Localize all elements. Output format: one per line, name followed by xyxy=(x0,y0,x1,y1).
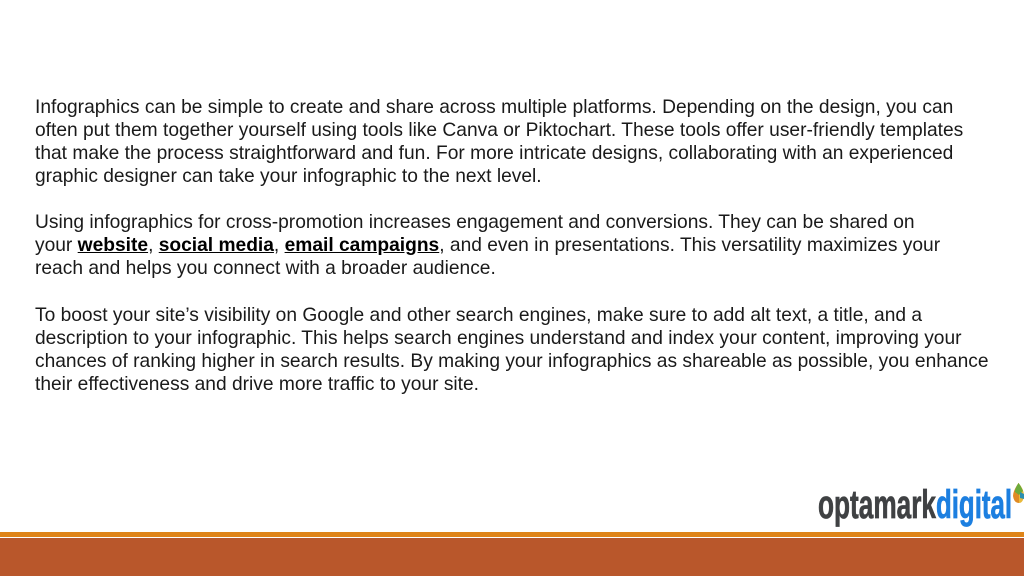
icon: colored drop xyxy=(1013,483,1024,503)
paragraph: search visibility: description to your infographic. This helps search engines understand and index your content, improving your xyxy=(35,328,962,349)
footer: orange stripe xyxy=(0,532,1024,537)
paragraph: creating infographics: often put them together yourself using tools like Canva or Piktochart. These tools offer user-friendly templates xyxy=(35,120,963,141)
paragraph: cross-promotion: your website, social media, email campaigns, and even in presentations. This versatility maximizes your xyxy=(35,235,940,256)
paragraph: search visibility: chances of ranking higher in search results. By making your infographics as shareable as possible, you enhance xyxy=(35,351,989,372)
paragraph: search visibility: To boost your site’s visibility on Google and other search engines, make sure to add alt text, a title, and a xyxy=(35,305,922,326)
logo: optamarkdigital xyxy=(818,483,1024,527)
paragraph: creating infographics: graphic designer can take your infographic to the next level. xyxy=(35,166,542,187)
footer: brown band xyxy=(0,538,1024,576)
paragraph: creating infographics: that make the process straightforward and fun. For more intricate designs, collaborating with an experienced xyxy=(35,143,953,164)
paragraph: creating infographics: Infographics can be simple to create and share across multiple platforms. Depending on the design, you can xyxy=(35,97,953,118)
paragraph: cross-promotion: Using infographics for cross-promotion increases engagement and conversions. They can be shared on xyxy=(35,212,915,233)
paragraph: search visibility xyxy=(35,305,989,395)
paragraph: creating infographics xyxy=(35,97,963,187)
paragraph: search visibility: their effectiveness and drive more traffic to your site. xyxy=(35,374,479,395)
paragraph: cross-promotion xyxy=(35,212,940,279)
paragraph: cross-promotion: reach and helps you connect with a broader audience. xyxy=(35,258,496,279)
logo wordmark: optamark xyxy=(818,483,936,527)
